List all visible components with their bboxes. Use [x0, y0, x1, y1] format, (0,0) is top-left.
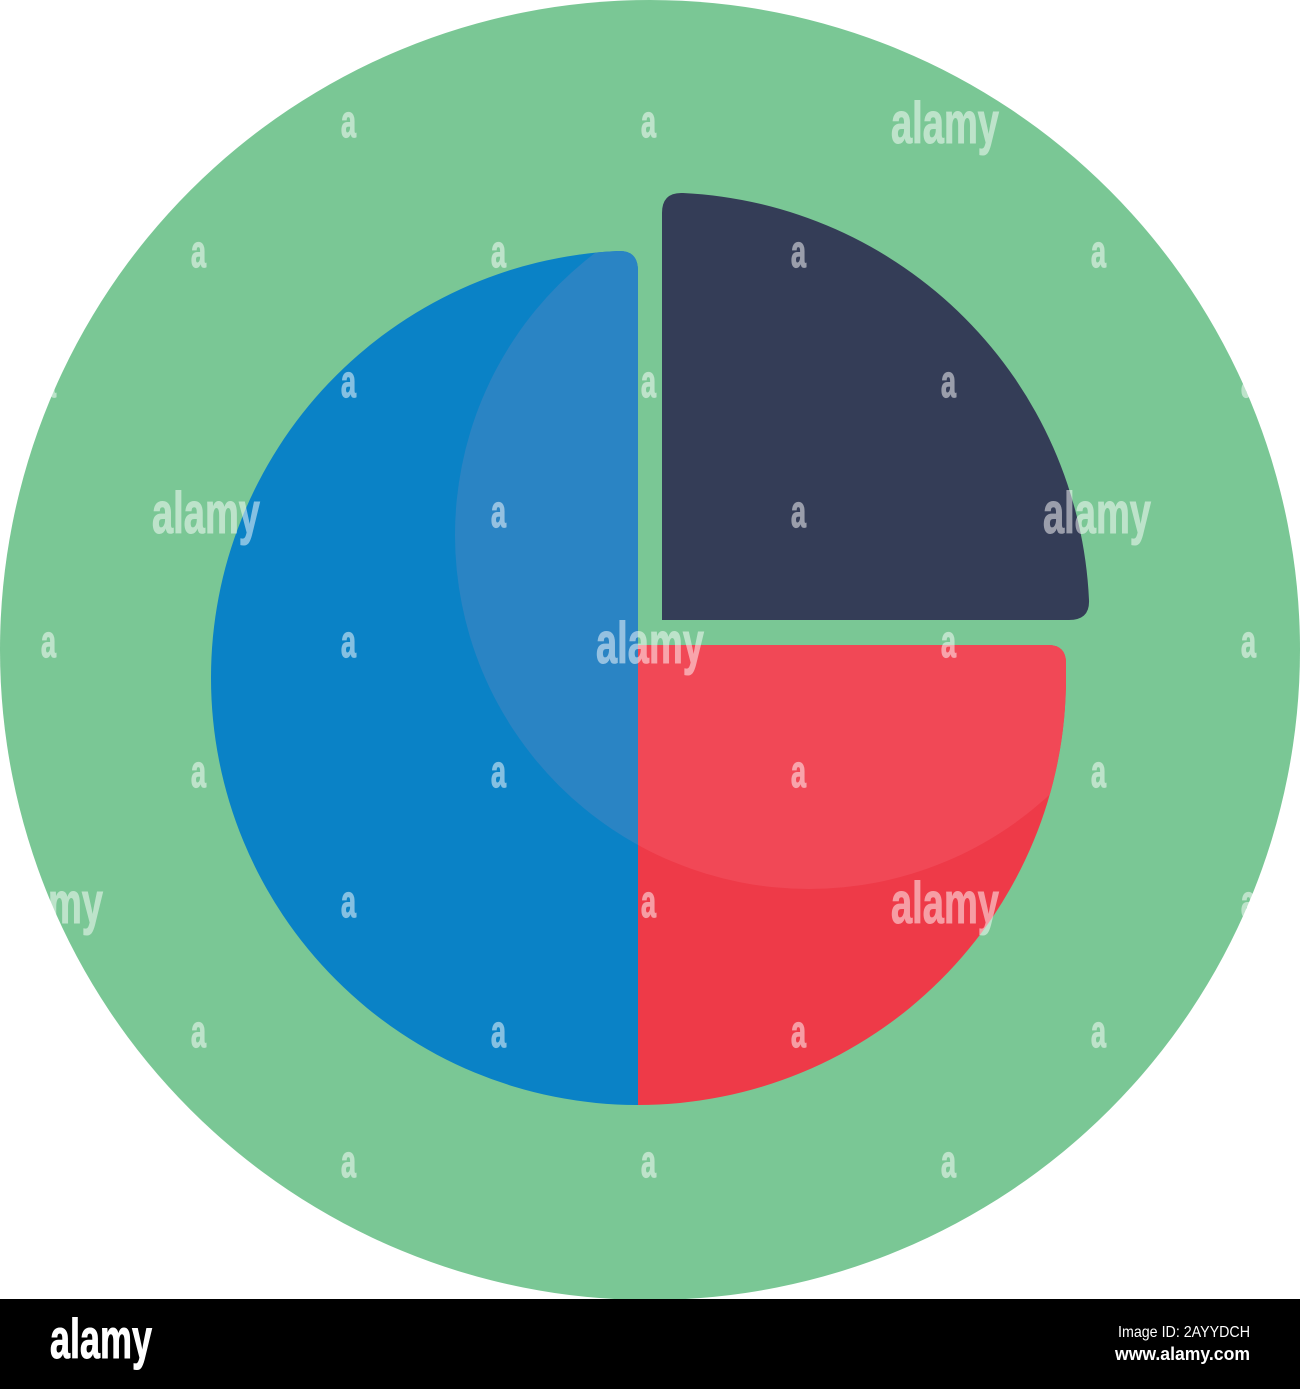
slice: blue half	[211, 251, 638, 1105]
watermarks: small repeated marks: a	[641, 876, 657, 927]
footer bar	[0, 1299, 1300, 1389]
watermarks: alamy wordmarks: alamy	[596, 611, 704, 676]
watermarks: small repeated marks: a	[491, 746, 507, 797]
watermarks: alamy wordmarks	[0, 91, 1151, 936]
watermarks: alamy wordmarks: alamy	[891, 91, 999, 156]
watermarks: small repeated marks: a	[191, 746, 207, 797]
watermarks: small repeated marks: a	[491, 486, 507, 537]
watermarks: small repeated marks: a	[41, 616, 57, 667]
watermarks: small repeated marks: a	[341, 96, 357, 147]
slice: red quarter	[638, 645, 1066, 1105]
watermarks: small repeated marks: a	[491, 226, 507, 277]
watermarks: small repeated marks: a	[941, 616, 957, 667]
watermarks: small repeated marks: a	[341, 1136, 357, 1187]
footer logo: alamy	[50, 1307, 152, 1370]
watermarks: small repeated marks: a	[641, 1136, 657, 1187]
watermarks: small repeated marks: a	[641, 96, 657, 147]
watermarks: small repeated marks: a	[1241, 876, 1257, 927]
watermarks: small repeated marks: a	[41, 356, 57, 407]
watermarks: small repeated marks: a	[341, 616, 357, 667]
watermarks: small repeated marks: a	[491, 1006, 507, 1057]
watermarks: small repeated marks: a	[341, 356, 357, 407]
slice: navy quarter	[662, 193, 1089, 620]
watermarks: small repeated marks: a	[1241, 356, 1257, 407]
watermarks: small repeated marks: a	[791, 486, 807, 537]
watermarks: alamy wordmarks: alamy	[152, 481, 260, 546]
watermarks: small repeated marks: a	[341, 876, 357, 927]
footer website: www.alamy.com	[1114, 1344, 1250, 1364]
watermarks: small repeated marks: a	[191, 1006, 207, 1057]
watermarks: alamy wordmarks: alamy	[1043, 481, 1151, 546]
watermarks: alamy wordmarks: alamy	[891, 871, 999, 936]
watermarks: small repeated marks: a	[1241, 616, 1257, 667]
watermarks: small repeated marks: a	[1091, 746, 1107, 797]
watermarks: small repeated marks: a	[941, 356, 957, 407]
watermarks: small repeated marks: a	[791, 1006, 807, 1057]
watermarks: small repeated marks: a	[941, 1136, 957, 1187]
watermarks: small repeated marks: a	[1091, 226, 1107, 277]
pie chart	[211, 193, 1089, 1105]
watermarks: small repeated marks: a	[791, 746, 807, 797]
watermarks: small repeated marks: a	[191, 226, 207, 277]
watermarks: small repeated marks: a	[791, 226, 807, 277]
watermarks: small repeated marks: a	[1091, 1006, 1107, 1057]
watermarks: small repeated marks: a	[641, 356, 657, 407]
footer image id: Image ID: 2AYYDCH	[1118, 1324, 1250, 1341]
watermarks: small repeated marks	[41, 96, 1257, 1187]
